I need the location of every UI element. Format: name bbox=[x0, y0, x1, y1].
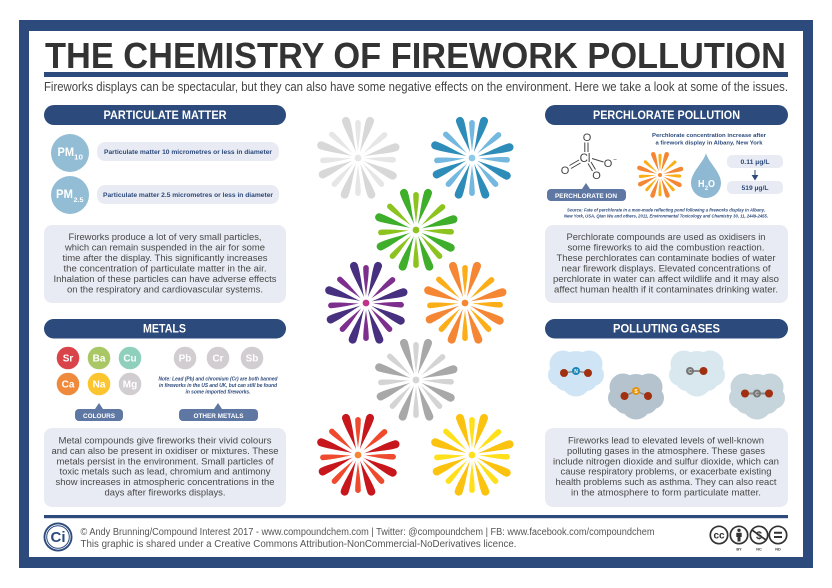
firework: dark grey bbox=[374, 338, 458, 422]
PM2.5 label bbox=[97, 185, 279, 204]
label: other metals bbox=[179, 403, 258, 421]
title: THE CHEMISTRY OF FIREWORK POLLUTION bbox=[45, 35, 786, 76]
icon: compound interest logo bbox=[44, 522, 72, 552]
icon: creative commons licence: BY bbox=[736, 548, 742, 552]
cloud: carbon dioxide: C bbox=[755, 391, 759, 397]
firework: yellow bbox=[430, 413, 514, 497]
PM2.5 label: Particulate matter 2.5 micrometres or less in diameter bbox=[103, 192, 274, 199]
footer credits bbox=[80, 527, 654, 550]
cloud: nitrogen dioxide bbox=[548, 350, 604, 396]
chart title bbox=[652, 133, 767, 146]
text block: perchlorate bbox=[545, 225, 788, 303]
note bbox=[158, 376, 278, 396]
icon: compound interest logo: Ci bbox=[50, 529, 66, 546]
water drop: O bbox=[708, 178, 715, 190]
PM10 badge bbox=[51, 134, 89, 172]
text block: particulate matter: the concentration of particulate matter in the air. bbox=[64, 264, 266, 274]
text block: perchlorate: affect human health if it contaminates drinking water. bbox=[554, 285, 778, 296]
text block: perchlorate: Perchlorate compounds are used as oxidisers in bbox=[566, 232, 766, 243]
water drop bbox=[691, 153, 721, 198]
text block: particulate matter bbox=[44, 225, 286, 303]
text block: metals: toxic metals such as lead, chromium and antimony bbox=[60, 466, 271, 478]
label: perchlorate ion: PERCHLORATE ION bbox=[555, 193, 617, 200]
source: New York, USA, Qian Wu and others, 2011, Environmental Toxicology and Chemistry 30, 11, 2449-2455. bbox=[564, 214, 768, 218]
PM2.5 badge bbox=[51, 176, 89, 214]
cloud: carbon dioxide bbox=[729, 374, 785, 420]
firework: green bbox=[374, 188, 458, 272]
panel: metals bbox=[44, 319, 286, 507]
heading: metals bbox=[44, 319, 286, 338]
other metals row bbox=[174, 347, 263, 369]
footer credits: © Andy Brunning/Compound Interest 2017 - www.compoundchem.com | Twitter: @compoundchem | FB: www.facebook.com/compoundchem bbox=[80, 527, 654, 538]
text block: particulate matter: Inhalation of these particles can have adverse effects bbox=[54, 274, 277, 285]
arrow bbox=[752, 170, 758, 180]
other metals row: Cr bbox=[212, 354, 224, 364]
firework: orange bbox=[423, 261, 507, 345]
value after bbox=[727, 181, 783, 194]
PM2.5 badge: PM bbox=[56, 187, 73, 201]
panel: particulate matter bbox=[44, 105, 286, 303]
perchlorate ion structure: O bbox=[561, 165, 570, 177]
firework: purple bbox=[324, 261, 408, 345]
icon: creative commons licence bbox=[710, 526, 787, 552]
water drop: H bbox=[698, 178, 704, 190]
cloud: carbon monoxide bbox=[669, 350, 725, 396]
text block: particulate matter: time after the display. This significantly increases bbox=[62, 253, 268, 264]
PM10 label bbox=[97, 142, 279, 161]
colour metals grid: Na bbox=[93, 380, 106, 390]
label: colours bbox=[75, 403, 123, 421]
source bbox=[564, 208, 768, 218]
icon: creative commons licence: NC bbox=[756, 548, 762, 552]
label: other metals: OTHER METALS bbox=[194, 413, 244, 420]
heading: perchlorate pollution bbox=[545, 105, 788, 125]
value before: 0.11 µg/L bbox=[740, 159, 770, 166]
water drop: 2 bbox=[705, 186, 709, 192]
colour metals grid: Mg bbox=[123, 380, 137, 390]
text block: polluting gases: cause respiratory problems, or exacerbate existing bbox=[560, 466, 772, 478]
text block: polluting gases: in the atmosphere to form particulate matter. bbox=[571, 488, 761, 499]
text block: polluting gases: include nitrogen dioxide and sulfur dioxide, which can bbox=[553, 456, 779, 467]
text block: perchlorate: These perchlorates can contaminate bodies of water bbox=[556, 253, 776, 264]
text block: perchlorate: some fireworks to aid the combustion reaction. bbox=[568, 242, 764, 254]
title rule bbox=[44, 72, 788, 77]
other metals row: Pb bbox=[179, 354, 191, 364]
heading: polluting gases: POLLUTING GASES bbox=[613, 322, 720, 336]
perchlorate ion structure bbox=[561, 132, 617, 182]
text block: polluting gases: Fireworks lead to elevated levels of well-known bbox=[568, 435, 764, 446]
icon: creative commons licence: cc bbox=[713, 530, 725, 542]
text block: metals: metals persist in the environment. Small particles of bbox=[56, 456, 274, 467]
perchlorate ion structure: O bbox=[604, 158, 613, 170]
perchlorate ion structure: O bbox=[583, 132, 592, 144]
icon: creative commons licence: $ bbox=[756, 530, 762, 542]
label: perchlorate ion bbox=[547, 183, 626, 201]
text block: metals: and can also be present in oxidiser or mixtures. These bbox=[52, 446, 278, 457]
perchlorate ion structure: O bbox=[592, 170, 601, 182]
text block: polluting gases bbox=[545, 428, 788, 507]
text block: metals: show increases in atmospheric concentrations in the bbox=[56, 477, 274, 488]
cloud: sulfur dioxide bbox=[608, 374, 664, 420]
heading: metals: METALS bbox=[143, 322, 186, 336]
heading: particulate matter: PARTICULATE MATTER bbox=[104, 108, 227, 122]
text block: metals: Metal compounds give fireworks their vivid colours bbox=[58, 435, 272, 446]
text block: polluting gases: polluting gases in the atmosphere. These gases bbox=[567, 446, 765, 457]
text block: perchlorate: perchlorate in water can affect wildlife and it may also bbox=[553, 274, 779, 285]
chart title: Perchlorate concentration increase after bbox=[652, 133, 767, 139]
PM2.5 badge: 2.5 bbox=[74, 197, 84, 204]
text block: metals: days after fireworks displays. bbox=[104, 488, 226, 499]
heading: perchlorate pollution: PERCHLORATE POLLUTION bbox=[593, 108, 740, 122]
colour metals grid: Ca bbox=[62, 380, 75, 390]
cloud: nitrogen dioxide: N bbox=[574, 369, 578, 375]
firework: light grey bbox=[316, 116, 400, 200]
text block: perchlorate: near firework displays. Elevated concentrations of bbox=[562, 264, 771, 274]
PM10 label: Particulate matter 10 micrometres or less in diameter bbox=[104, 149, 273, 156]
firework: red bbox=[316, 413, 400, 497]
perchlorate ion structure: Cl bbox=[580, 153, 590, 165]
panel: polluting gases bbox=[545, 319, 788, 507]
label: colours: COLOURS bbox=[83, 413, 116, 420]
perchlorate ion structure: − bbox=[613, 156, 617, 164]
other metals row: Sb bbox=[246, 354, 258, 364]
firework: blue bbox=[430, 116, 514, 200]
heading: polluting gases bbox=[545, 319, 788, 338]
value after: 519 µg/L bbox=[742, 185, 768, 192]
text block: particulate matter: on the respiratory and cardiovascular systems. bbox=[67, 285, 263, 296]
footer credits: This graphic is shared under a Creative Commons Attribution-NonCommercial-NoDerivatives licence. bbox=[80, 539, 516, 550]
cloud: sulfur dioxide: S bbox=[634, 389, 638, 395]
colour metals grid: Sr bbox=[63, 354, 73, 364]
text block: metals bbox=[44, 428, 286, 507]
heading: particulate matter bbox=[44, 105, 286, 125]
colour metals grid bbox=[57, 347, 141, 395]
icon: creative commons licence: ND bbox=[775, 548, 781, 552]
fireworks column bbox=[316, 116, 514, 497]
chart title: a firework display in Albany, New York bbox=[656, 140, 763, 146]
colour metals grid: Ba bbox=[93, 354, 106, 364]
mini firework bbox=[637, 151, 684, 198]
PM10 badge: 10 bbox=[74, 154, 83, 162]
panel: perchlorate pollution bbox=[545, 105, 788, 303]
source: Source: Fate of perchlorate in a man-made reflecting pond following a fireworks display in Albany, bbox=[567, 208, 765, 212]
value before bbox=[727, 155, 783, 168]
note: in fireworks in the US and UK, but can still be found bbox=[159, 383, 278, 389]
cloud: carbon monoxide: C bbox=[688, 369, 692, 375]
footer rule bbox=[44, 515, 788, 518]
text block: particulate matter: which can remain suspended in the air for some bbox=[64, 242, 265, 254]
note: Note: Lead (Pb) and chromium (Cr) are both banned bbox=[158, 376, 278, 382]
PM10 badge: PM bbox=[58, 145, 74, 159]
note: in some imported fireworks. bbox=[186, 390, 251, 396]
text block: particulate matter: Fireworks produce a lot of very small particles, bbox=[68, 232, 262, 243]
text block: polluting gases: health problems such as asthma. They can also react bbox=[556, 477, 777, 488]
colour metals grid: Cu bbox=[123, 354, 137, 364]
